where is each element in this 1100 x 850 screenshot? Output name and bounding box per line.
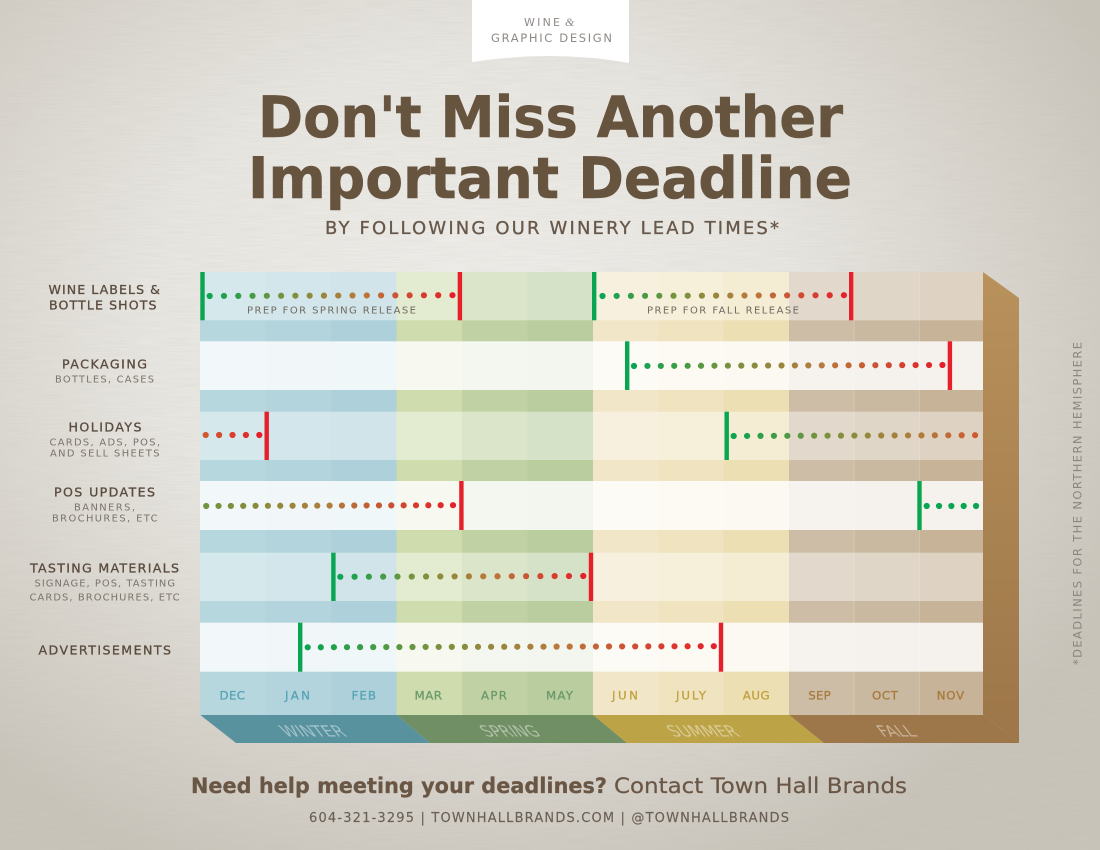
month labels: OCT [872, 689, 899, 703]
label: pos updates: POS UPDATES [54, 485, 155, 500]
label: pos updates: BANNERS, [74, 503, 135, 514]
label: holidays: HOLIDAYS [68, 419, 142, 434]
label: tasting materials [29, 560, 180, 603]
label: wine labels and bottle shots: WINE LABELS & [48, 282, 160, 297]
month labels [220, 689, 964, 703]
timeline: advertisements [298, 623, 723, 672]
season floor: fall [789, 715, 1019, 743]
title: Important Deadline [248, 146, 852, 212]
season floor: fall: FALL [872, 723, 922, 741]
label: holidays [50, 419, 160, 459]
banner: wine & graphic design: GRAPHIC DESIGN [491, 31, 612, 45]
label: packaging: BOTTLES, CASES [55, 375, 154, 386]
label: wine labels and bottle shots: BOTTLE SHOTS [49, 297, 156, 312]
month labels: FEB [352, 689, 376, 703]
label: holidays: CARDS, ADS, POS, [50, 437, 160, 448]
timeline: packaging [625, 341, 952, 390]
contact details: 604-321-3295 | TOWNHALLBRANDS.COM | @TOWNHALLBRANDS [309, 811, 789, 826]
season floor: summer: SUMMER [662, 723, 745, 741]
side note: northern hemisphere: *DEADLINES FOR THE NORTHERN HEMISPHERE [1070, 342, 1084, 665]
row bands [200, 272, 983, 672]
banner: wine & graphic design: WINE [524, 16, 560, 29]
month labels: JULY [675, 689, 707, 703]
label: packaging: PACKAGING [62, 357, 147, 372]
timeline: holidays, start of run [724, 412, 976, 460]
season floor: spring [396, 715, 627, 743]
season floor: winter [200, 715, 430, 743]
month labels: AUG [743, 689, 770, 703]
month labels: NOV [937, 689, 964, 703]
season floor: winter: WINTER [275, 723, 352, 741]
title [248, 85, 852, 212]
timeline: pos updates, end of run [206, 481, 464, 530]
month columns [200, 272, 983, 715]
label: wine labels and bottle shots [48, 282, 160, 312]
month labels: APR [481, 689, 507, 703]
timeline: tasting materials [331, 553, 593, 601]
label: holidays: AND SELL SHEETS [50, 448, 160, 459]
subtitle: BY FOLLOWING OUR WINERY LEAD TIMES* [325, 218, 779, 239]
month labels: MAY [546, 689, 574, 703]
timeline: wine labels, prep for fall release: PREP FOR FALL RELEASE [647, 306, 799, 317]
timeline: wine labels, prep for spring release [200, 272, 462, 320]
season floor: summer [593, 715, 824, 743]
timeline: wine labels, prep for spring release: PREP FOR SPRING RELEASE [247, 306, 416, 317]
season floor: spring: SPRING [475, 723, 546, 741]
timeline: holidays, end of run [206, 412, 269, 460]
call to action: Contact Town Hall Brands [614, 774, 907, 798]
right side face [983, 272, 1019, 743]
banner: wine & graphic design: & [565, 15, 575, 29]
title: Don't Miss Another [258, 85, 843, 151]
month labels: MAR [414, 689, 442, 703]
label: tasting materials: CARDS, BROCHURES, ETC [30, 592, 180, 603]
month labels: DEC [220, 689, 245, 703]
call to action: Need help meeting your deadlines? [191, 774, 607, 798]
month labels: SEP [808, 689, 831, 703]
call to action [191, 774, 907, 798]
label: tasting materials: TASTING MATERIALS [29, 560, 179, 575]
timeline: pos updates, start of run [917, 481, 977, 530]
banner: wine & graphic design [472, 0, 629, 63]
label: tasting materials: SIGNAGE, POS, TASTING [34, 578, 175, 589]
label: packaging [55, 357, 154, 386]
label: pos updates [52, 485, 158, 524]
month labels: JUN [611, 689, 638, 703]
row labels [29, 282, 180, 658]
label: advertisements: ADVERTISEMENTS [38, 643, 171, 658]
timeline: wine labels, prep for fall release [592, 272, 853, 320]
label: pos updates: BROCHURES, ETC [52, 514, 158, 524]
chart: lead-time calendar block [200, 272, 1019, 743]
month labels: JAN [284, 689, 310, 703]
